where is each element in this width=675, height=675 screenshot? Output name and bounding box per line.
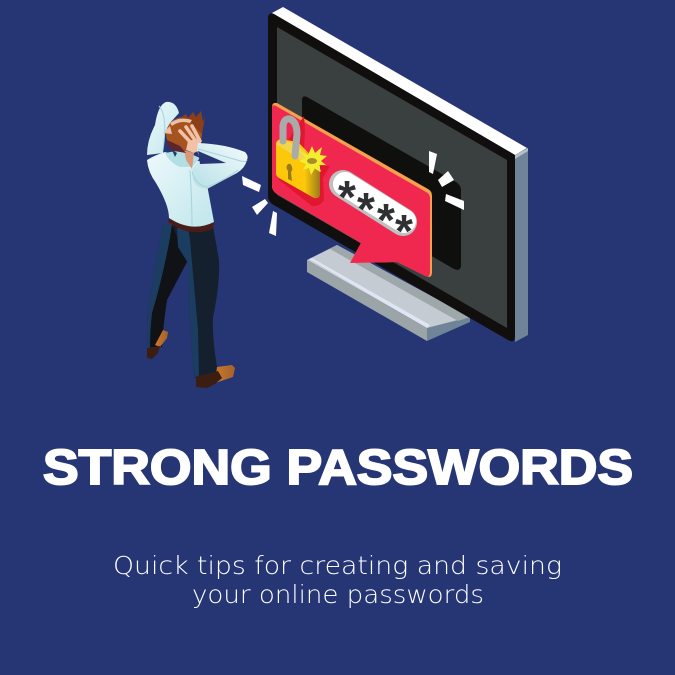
password asterisks: * (357, 183, 375, 235)
monitor screen (277, 27, 507, 328)
password asterisks: * (338, 171, 356, 223)
inner dark window (302, 96, 461, 270)
keyhole (286, 164, 292, 181)
subtitle (113, 551, 562, 609)
password field (338, 171, 413, 257)
alert speech bubble (272, 103, 432, 277)
raised arm (147, 102, 179, 155)
subtitle: Quick tips for creating and saving (113, 551, 562, 580)
password asterisks: * (395, 205, 413, 257)
subtitle: your online passwords (192, 580, 484, 609)
hand (180, 126, 202, 153)
lock shackle (283, 119, 297, 156)
title: STRONG PASSWORDS (43, 441, 633, 495)
padlock (276, 116, 330, 206)
spark (299, 146, 327, 175)
monitor (268, 7, 528, 342)
torso (147, 152, 214, 227)
person alert lines (242, 176, 277, 236)
person (147, 102, 248, 388)
monitor stand (307, 245, 470, 341)
head and hair (163, 111, 205, 169)
monitor alert lines (429, 151, 464, 210)
password asterisks (338, 171, 413, 257)
fingers on top of head (170, 119, 192, 126)
shirt collar (165, 150, 200, 167)
bent arm (192, 143, 248, 189)
shoes (147, 330, 235, 388)
belt (168, 218, 214, 232)
gap between forearm and upper arm (198, 151, 226, 164)
password asterisks: * (377, 194, 395, 246)
trousers (147, 224, 219, 378)
